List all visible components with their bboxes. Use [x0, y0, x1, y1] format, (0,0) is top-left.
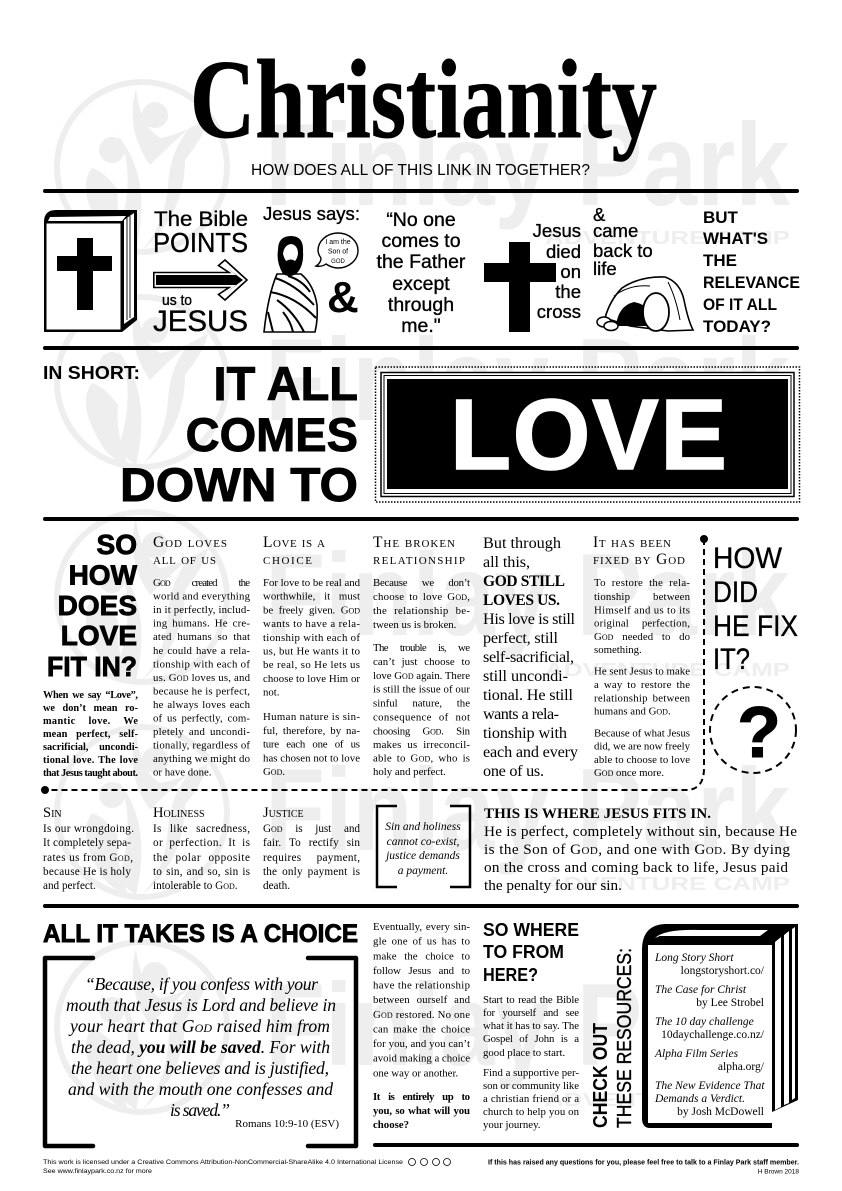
column: so where to from here: Start to read the Bible [483, 994, 579, 1006]
text: The Bible points us to Jesus: POINTS [153, 227, 248, 258]
column: love is a choice: not. [263, 687, 280, 699]
column: sin: because He is holy [43, 866, 131, 878]
text: Jesus died on the cross: cross [537, 301, 581, 322]
column: so where to from here: son or community like [483, 1080, 579, 1092]
column: so where to from here: your journey. [483, 1119, 540, 1131]
icon: bible with cross [44, 210, 137, 332]
list: recommended resources: Long Story Short [654, 952, 734, 964]
column: eventually every single one: can make the choice [373, 1023, 470, 1035]
column: so where to from here [483, 919, 580, 1131]
list: recommended resources [654, 952, 765, 1118]
column: the broken relationship: relationship [373, 551, 465, 568]
column: God still loves us: self-sacrificial, [483, 648, 574, 666]
column: eventually every single one [373, 921, 471, 1131]
watermark: Finlay Park logos and wordmarks: ADVENTURE CAMP [545, 1090, 790, 1110]
column: sin: rates us from God, [43, 852, 133, 864]
column: the broken relationship: choose to love God, [373, 591, 470, 603]
column: the broken relationship: the relationship be- [373, 605, 470, 617]
column: eventually every single one: you, so what will you [373, 1105, 470, 1117]
heading: so how does love fit in: LOVE [61, 620, 137, 651]
list: recommended resources: The Case for Christ [655, 984, 747, 996]
column: God still loves us: tional. He still [483, 686, 574, 704]
column: God still loves us: But through [483, 534, 561, 552]
column: the broken relationship: holy and perfect. [373, 766, 446, 778]
column: eventually every single one: have the relationship [373, 980, 470, 992]
column: it has been fixed by God: a way to restore the [594, 679, 690, 691]
column: love is a choice: Love is a [263, 534, 325, 551]
column: God loves all of us: God loves [153, 534, 227, 551]
text: and came back to life: back to [593, 240, 653, 261]
text: and came back to life: & [593, 204, 606, 225]
footer: licence [43, 1158, 450, 1175]
footer: licence: See www.finlaypark.co.nz for more [43, 1168, 152, 1175]
callout: sin and holiness: cannot co-exist, [387, 836, 460, 848]
quote: No one comes to the Father: me." [401, 315, 441, 337]
column: justice: fair. To rectify sin [263, 837, 360, 849]
column: holiness: or perfection. It is [153, 837, 250, 849]
column: it has been fixed by God: something. [594, 644, 642, 656]
heading: it all comes down to [120, 357, 358, 511]
column: God loves all of us: he always loves each [153, 699, 251, 711]
text: The Bible points us to Jesus [153, 208, 248, 338]
column: love is a choice: has chosen not to love [263, 752, 360, 764]
heading: how did he fix it: HE FIX [713, 610, 798, 643]
callout: Romans quote: Romans 10:9-10 (ESV) [235, 1118, 339, 1130]
callout: sin and holiness [377, 806, 470, 887]
column: God loves all of us: ing humans. He cre- [153, 618, 250, 630]
column: holiness: Holiness [153, 805, 205, 821]
column: it has been fixed by God: He sent Jesus to make [594, 666, 690, 678]
subtitle: HOW DOES ALL OF THIS LINK IN TOGETHER? [251, 162, 590, 179]
icon: question mark in dashed circle [710, 687, 796, 773]
speech bubble: I am the Son of God: Son of [328, 248, 348, 256]
column: so where to from here: SO WHERE [483, 919, 579, 940]
icon: resources book [642, 924, 798, 1128]
heading: how did he fix it [713, 542, 798, 676]
quote: No one comes to the Father: the Father [377, 251, 466, 273]
text: Jesus died on the cross [533, 220, 581, 322]
column: God loves all of us: pletely and uncondi- [153, 726, 250, 738]
text: this is where Jesus fits in [484, 806, 797, 894]
list: recommended resources: alpha.org/ [718, 1061, 765, 1073]
text: this is where Jesus fits in: the penalty for our sin. [484, 877, 622, 894]
column: the broken relationship: consequence of not [373, 712, 470, 724]
text: this is where Jesus fits in: is the Son of God, and one with God. By dying [484, 841, 790, 858]
column: so where to from here: good place to start. [483, 1047, 565, 1059]
column: justice: Justice [263, 805, 304, 821]
column: God still loves us: one of us. [483, 762, 544, 780]
icon: question mark in dashed circle: ? [737, 693, 781, 773]
heading: it all comes down to: IT ALL [214, 357, 358, 410]
text: but what's the relevance: OF IT ALL [703, 295, 777, 314]
column: love is a choice: us, but He wants it to [263, 646, 360, 658]
column: the broken relationship: able to God, who is [373, 752, 470, 764]
list: recommended resources: longstoryshort.co/ [681, 965, 765, 977]
column: God loves all of us: because he is perfect, [153, 685, 250, 697]
column: sin: and perfect. [43, 880, 96, 892]
column: eventually every single one: one way or another. [373, 1067, 458, 1079]
column: eventually every single one: It is entirely up to [373, 1091, 470, 1103]
text: but what's the relevance: BUT [703, 208, 739, 227]
watermark: Finlay Park logos and wordmarks: ADVENTURE CAMP [545, 660, 790, 680]
text: this is where Jesus fits in: He is perfect, completely without sin, because He [484, 823, 797, 840]
heading: it all comes down to: DOWN TO [120, 458, 358, 511]
text: meaning of love: that Jesus taught about. [43, 768, 138, 779]
column: love is a choice: choice [263, 551, 312, 568]
heading: so how does love fit in: FIT IN? [47, 651, 137, 682]
callout: Romans quote: mouth that Jesus is Lord and believe in [66, 995, 336, 1015]
list: recommended resources: Alpha Film Series [654, 1048, 739, 1060]
heading: how did he fix it: DID [713, 576, 758, 609]
footer: contact note: If this has raised any questions for you, please feel free to talk to a Finlay Park staff member. [488, 1160, 799, 1166]
callout: Romans quote: the heart one believes and is justified, [71, 1058, 329, 1078]
list: recommended resources: The New Evidence That [655, 1080, 765, 1092]
text: Jesus died on the cross: died [546, 241, 581, 262]
column: so where to from here: TO FROM [483, 941, 564, 962]
footer: contact note [488, 1160, 799, 1176]
column: it has been fixed by God: did, we are now freely [594, 741, 691, 753]
dashed connector line [41, 535, 708, 794]
column: God still loves us [483, 534, 579, 780]
column: eventually every single one: God restored. No one [373, 1009, 470, 1021]
column: eventually every single one: follow Jesus and to [373, 965, 470, 977]
column: love is a choice: God. [263, 766, 285, 778]
column: God loves all of us [153, 534, 251, 779]
column: it has been fixed by God: God once more. [594, 767, 664, 779]
column: God loves all of us: tionship with each of [153, 658, 250, 670]
column: holiness: Is like sacredness, [153, 823, 250, 835]
column: the broken relationship: tween us is broken. [373, 619, 456, 631]
title: Christianity [190, 38, 657, 162]
column: it has been fixed by God: It has been [593, 534, 671, 551]
column: eventually every single one: Eventually, every sin- [373, 921, 470, 933]
column: God still loves us: His love is still [483, 610, 576, 628]
column: sin: Sin [43, 805, 62, 821]
text: but what's the relevance: TODAY? [703, 317, 771, 336]
text: this is where Jesus fits in: on the cross and coming back to life, Jesus paid [484, 859, 788, 876]
callout: Romans quote [45, 958, 356, 1146]
column: the broken relationship: sinful nature, the [373, 698, 470, 710]
callout: Romans quote: is saved.” [170, 1100, 230, 1120]
column: eventually every single one: for you, and you can’t [373, 1038, 470, 1050]
text: this is where Jesus fits in: THIS IS WHERE JESUS FITS IN. [484, 806, 711, 822]
column: God loves all of us: ated humans so that [153, 631, 250, 643]
text: Jesus died on the cross: the [555, 281, 581, 302]
column: love is a choice: choose to love Him or [263, 673, 360, 685]
heading: all it takes is a choice: ALL IT TAKES IS A CHOICE [43, 920, 358, 948]
column: the broken relationship: Because we don’t [373, 577, 470, 589]
icon: empty tomb [597, 277, 693, 331]
column: love is a choice: ful, therefore, by na- [263, 725, 360, 737]
column: so where to from here: a christian friend or a [483, 1093, 579, 1105]
text: The Bible points us to Jesus: us to [162, 292, 192, 309]
speech bubble: I am the Son of God: GOD [331, 259, 345, 265]
column: the broken relationship: is still the issue of our [373, 684, 470, 696]
column: the broken relationship: choosing God. Sin [373, 726, 471, 738]
column: God loves all of us: all of us [153, 551, 216, 568]
column: eventually every single one: between ourself and [373, 994, 471, 1006]
panel: LOVE box [376, 367, 800, 502]
column: justice [263, 805, 360, 892]
column: holiness: to sin, and so, sin is [153, 866, 250, 878]
column: love is a choice: be real, so He lets us [263, 659, 360, 671]
text: meaning of love: tional love. The love [43, 755, 138, 766]
heading: how did he fix it: IT? [713, 643, 750, 676]
text: Jesus died on the cross: Jesus [533, 220, 581, 241]
text: meaning of love: mantic love. We [43, 716, 138, 727]
column: holiness [153, 805, 250, 892]
column: God loves all of us: anything we might do [153, 753, 250, 765]
column: love is a choice: Human nature is sin- [263, 711, 360, 723]
column: holiness: intolerable to God. [153, 880, 238, 892]
heading: it all comes down to: COMES [186, 408, 358, 461]
column: justice: God is just and [263, 823, 360, 835]
column: God still loves us: all this, [483, 553, 530, 571]
vertical heading: check out these resources [590, 948, 636, 1128]
list: recommended resources: by Lee Strobel [696, 997, 764, 1009]
heading: so how does love fit in [47, 529, 138, 682]
text: but what's the relevance: WHAT'S [703, 229, 768, 248]
column: God loves all of us: in it perfectly, includ- [153, 604, 250, 616]
heading: so how does love fit in: DOES [58, 590, 137, 621]
text: Jesus says: Jesus says: [263, 203, 360, 224]
text: The Bible points us to Jesus: The Bible [154, 208, 248, 231]
text: meaning of love [43, 690, 139, 779]
column: so where to from here: Gospel of John is a [483, 1033, 579, 1045]
footer: contact note: H Brown 2018 [758, 1168, 799, 1176]
callout: Romans quote: your heart that God raised him from [68, 1016, 330, 1036]
column: God still loves us: wants a rela- [483, 705, 559, 723]
column: love is a choice: tionship with each of [263, 632, 360, 644]
column: the broken relationship: can’t just choose to [373, 656, 470, 668]
text: and came back to life: life [593, 258, 617, 279]
panel: LOVE box: LOVE [450, 379, 727, 491]
text: and came back to life [593, 204, 653, 279]
column: it has been fixed by God: relationship between [594, 692, 691, 704]
column: so where to from here: for yourself and see [483, 1007, 579, 1019]
watermark: Finlay Park logos and wordmarks: ADVENTURE CAMP [545, 228, 790, 248]
column: justice: the only payment is [263, 866, 360, 878]
callout: sin and holiness: a payment. [398, 865, 448, 877]
quote: No one comes to the Father: “No one [386, 209, 456, 231]
column: the broken relationship: makes us irreconcil- [373, 739, 470, 751]
column: the broken relationship: love God again. There [373, 670, 470, 682]
heading: so how does love fit in: SO [97, 529, 137, 560]
text: meaning of love: mean perfect, self- [43, 729, 139, 740]
text: but what's the relevance: RELEVANCE [703, 273, 800, 292]
column: God still loves us: GOD STILL [483, 573, 565, 590]
column: love is a choice: wants to have a rela- [263, 618, 360, 630]
speech bubble: I am the Son of God [316, 233, 358, 268]
column: holiness: the polar opposite [153, 852, 250, 864]
column: so where to from here: what it has to say. The [483, 1020, 579, 1032]
callout: Romans quote: “Because, if you confess with your [85, 974, 318, 994]
column: God still loves us: tionship with [483, 724, 567, 742]
watermark: Finlay Park logos and wordmarks: ADVENTURE CAMP [545, 450, 790, 470]
watermark: Finlay Park logos and wordmarks [57, 82, 791, 1112]
column: so where to from here: HERE? [483, 964, 538, 985]
column: eventually every single one: choose? [373, 1119, 409, 1131]
column: love is a choice: For love to be real and [263, 577, 361, 589]
column: it has been fixed by God: To restore the rela- [594, 577, 690, 589]
column: the broken relationship: The broken [373, 534, 455, 551]
text: but what's the relevance [703, 208, 800, 336]
quote: No one comes to the Father: through [388, 294, 454, 316]
text: meaning of love: we don’t mean ro- [43, 703, 139, 714]
column: it has been fixed by God [593, 534, 691, 779]
text: The Bible points us to Jesus: JESUS [153, 305, 248, 338]
column: so where to from here: church to help you on [483, 1106, 580, 1118]
text: but what's the relevance: THE [703, 251, 737, 270]
quote: No one comes to the Father: except [392, 273, 450, 295]
column: God loves all of us: he could have a rela- [153, 645, 250, 657]
column: sin [43, 805, 134, 892]
column: love is a choice [263, 534, 361, 778]
callout: sin and holiness: justice demands [384, 850, 460, 862]
text: meaning of love: When we say “Love”, [43, 690, 138, 701]
column: the broken relationship: The trouble is, we [373, 642, 470, 654]
column: God loves all of us: world and everything [153, 590, 251, 602]
column: God still loves us: perfect, still [483, 629, 558, 647]
footer: licence: This work is licensed under a Creative Commons Attribution-NonCommercial-ShareAlike 4.0 International License [43, 1159, 403, 1166]
heading: how did he fix it: HOW [713, 542, 783, 575]
arrow: points to Jesus [154, 260, 247, 300]
column: it has been fixed by God: able to choose to love [594, 754, 690, 766]
text: meaning of love: sacrificial, uncondi- [43, 742, 139, 753]
column: the broken relationship [373, 534, 471, 778]
column: eventually every single one: make the choice to [373, 950, 470, 962]
list: recommended resources: The 10 day challenge [655, 1016, 754, 1028]
ampersand: & [327, 273, 359, 322]
quote: No one comes to the Father: comes to [381, 230, 461, 252]
quote: No one comes to the Father [377, 209, 466, 337]
column: it has been fixed by God: tionship between [594, 591, 691, 603]
column: sin: Is our wrongdoing. [43, 823, 134, 835]
column: God still loves us: still uncondi- [483, 667, 568, 685]
column: God still loves us: each and every [483, 743, 579, 761]
column: God loves all of us: of us perfectly, com- [153, 712, 250, 724]
icon: Jesus figure [264, 236, 317, 332]
callout: Romans quote: the dead, you will be saved. For with [71, 1037, 330, 1057]
column: justice: death. [263, 880, 290, 892]
column: so where to from here: Find a supportive per- [483, 1067, 579, 1079]
list: recommended resources: by Josh McDowell [677, 1106, 764, 1118]
column: it has been fixed by God: original perfection, [594, 618, 690, 630]
column: God still loves us: LOVES US. [483, 592, 560, 609]
list: recommended resources: Demands a Verdict. [654, 1093, 745, 1105]
vertical heading: check out these resources: THESE RESOURCES: [614, 948, 636, 1128]
column: justice: requires payment, [263, 852, 360, 864]
vertical heading: check out these resources: CHECK OUT [590, 1023, 612, 1128]
text: and came back to life: came [593, 220, 638, 241]
column: eventually every single one: avoid making a choice [373, 1053, 470, 1065]
column: it has been fixed by God: Himself and us to its [594, 604, 690, 616]
label: in short: IN SHORT: [43, 363, 140, 383]
column: God loves all of us: or have done. [153, 767, 211, 779]
column: it has been fixed by God: God needed to do [594, 631, 690, 643]
callout: Romans quote: and with the mouth one confesses and [68, 1079, 333, 1099]
list: recommended resources: 10daychallenge.co.nz/ [661, 1029, 765, 1041]
column: it has been fixed by God: Because of what Jesus [594, 727, 690, 739]
column: eventually every single one: gle one of us has to [373, 936, 470, 948]
watermark: Finlay Park logos and wordmarks: ADVENTURE CAMP [545, 874, 790, 894]
callout: sin and holiness: Sin and holiness [385, 821, 461, 833]
column: love is a choice: ture each one of us [263, 739, 360, 751]
column: love is a choice: worthwhile, it must [263, 591, 360, 603]
column: it has been fixed by God: fixed by God [593, 551, 685, 568]
column: God loves all of us: us. God loves us, and [153, 672, 251, 684]
column: it has been fixed by God: humans and God. [594, 706, 671, 718]
speech bubble: I am the Son of God: I am the [325, 239, 351, 246]
column: God loves all of us: God created the [153, 577, 250, 589]
column: sin: It completely sepa- [43, 837, 131, 849]
column: love is a choice: be freely given. God [263, 604, 360, 616]
icon: cross [484, 242, 556, 332]
heading: so how does love fit in: HOW [69, 560, 138, 590]
column: God loves all of us: tionally, regardless of [153, 740, 250, 752]
text: Jesus died on the cross: on [560, 261, 581, 282]
